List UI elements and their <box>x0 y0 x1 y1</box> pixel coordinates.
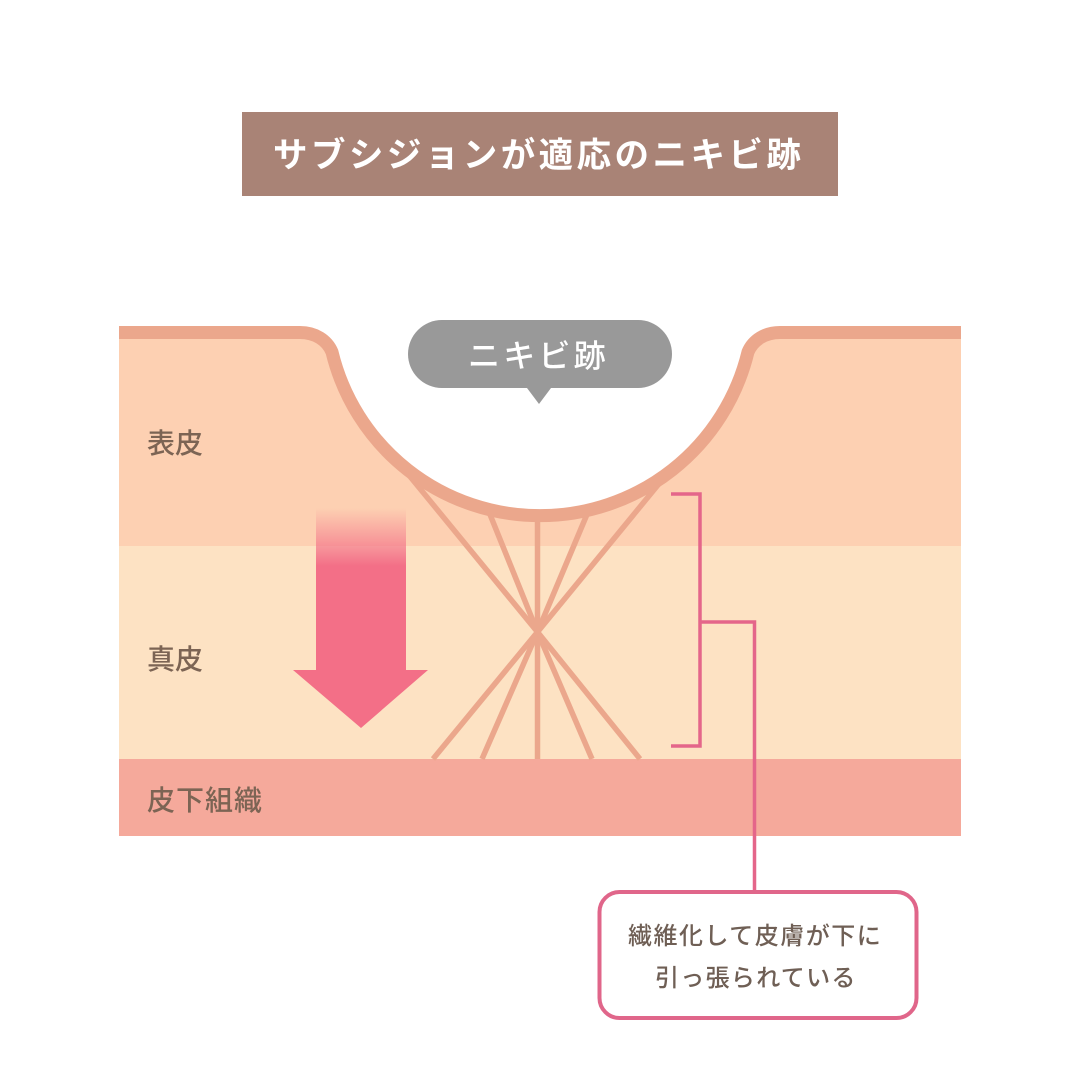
bracket and leader line <box>671 494 754 892</box>
layer: dermis <box>119 546 961 759</box>
callout: fibrosis explanation: 引っ張られている <box>655 965 857 992</box>
label: subcutaneous tissue: 皮下組織 <box>147 785 263 816</box>
acne scar depression <box>300 320 780 516</box>
layer: subcutaneous tissue <box>119 759 961 836</box>
title <box>242 112 838 196</box>
callout: acne scar label: ニキビ跡 <box>468 338 609 374</box>
skin cross-section diagram <box>119 320 961 836</box>
title: サブシジョンが適応のニキビ跡 <box>273 136 804 175</box>
label: dermis: 真皮 <box>147 644 203 675</box>
callout: acne scar label <box>408 320 672 404</box>
skin surface line <box>119 332 961 516</box>
arrow: pulled downward <box>293 508 428 728</box>
fibrous strands <box>408 474 662 759</box>
label: epidermis: 表皮 <box>147 428 203 459</box>
callout: fibrosis explanation: 繊維化して皮膚が下に <box>628 923 882 950</box>
callout: fibrosis explanation <box>600 892 916 1018</box>
layer: epidermis <box>119 326 961 546</box>
